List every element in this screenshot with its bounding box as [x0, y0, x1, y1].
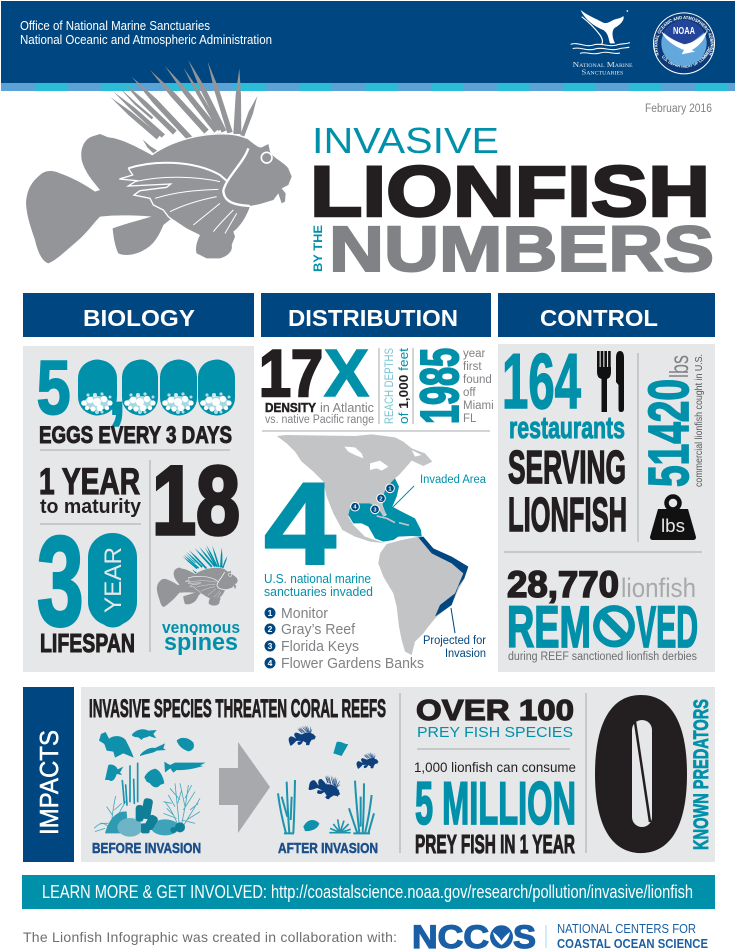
- heading: threat to reefs: INVASIVE SPECIES THREATEN CORAL REEFS: [89, 695, 386, 723]
- stat: 164 restaurants: LIONFISH: [508, 489, 627, 542]
- stat: 18 venomous spines: spines: [164, 629, 238, 656]
- logo: NOAA: NOAA: [673, 26, 695, 37]
- section headings: [23, 293, 715, 337]
- callout: projected for invasion: Projected for: [423, 635, 486, 647]
- header text: [20, 18, 272, 47]
- stat: 5 million prey fish: PREY FISH IN 1 YEAR: [415, 829, 575, 859]
- stat: 28,770 removed: [507, 564, 698, 663]
- legend: sanctuaries: 2: [268, 624, 273, 634]
- stat: 17X density: in Atlantic: [320, 401, 374, 415]
- caption: after: AFTER INVASION: [278, 841, 378, 857]
- legend: sanctuaries: Florida Keys: [281, 638, 359, 655]
- title: NUMBERS: [329, 213, 714, 285]
- stat: 51420 lbs: commercial lionfish cought in U.S.: [693, 354, 705, 487]
- stat: 1 year to maturity: [39, 461, 142, 518]
- stat: 30 year lifespan: LIFESPAN: [40, 628, 135, 658]
- title: BY THE: [313, 225, 325, 272]
- section headings: BIOLOGY: [83, 305, 195, 331]
- stat: 1985: year: [463, 348, 486, 360]
- stat: 164 restaurants: SERVING: [508, 441, 626, 493]
- callout: projected for invasion: [423, 608, 486, 660]
- map of the Americas: 3: [373, 507, 377, 513]
- stat: 5 million prey fish: 5 MILLION: [415, 770, 576, 837]
- stat: 50,000 eggs: 50,000: [37, 346, 234, 431]
- stat: 1985: first: [463, 361, 482, 373]
- stat: 18 venomous spines: venomous: [162, 618, 240, 637]
- stat: 1985: FL: [463, 413, 477, 425]
- logo: national marine sanctuaries: [571, 10, 633, 76]
- logo: national marine sanctuaries: Sanctuaries: [582, 68, 624, 76]
- arrow: [219, 742, 270, 833]
- legend: sanctuaries: 4: [268, 658, 273, 668]
- legend: sanctuaries: [264, 605, 424, 672]
- title: LIONFISH: [310, 153, 710, 232]
- icon: knife: [616, 351, 624, 412]
- stat: 28,770 removed: lionfish: [621, 573, 696, 603]
- impacts label: IMPACTS: [34, 730, 64, 835]
- stat: 50,000 eggs: EGGS EVERY 3 DAYS: [39, 422, 232, 449]
- stat: 1 year to maturity: to maturity: [40, 496, 142, 518]
- legend: sanctuaries: Monitor: [281, 605, 328, 622]
- banner: learn more: [22, 875, 715, 909]
- icon: weight: [650, 496, 696, 540]
- stat: 51420 lbs: 51420: [637, 379, 701, 487]
- lionfish illustration: [26, 60, 292, 263]
- stat: 30 year lifespan: YEAR: [100, 547, 127, 613]
- callout: invaded area: Invaded Area: [420, 474, 487, 486]
- header text: Office of National Marine Sanctuaries: [20, 18, 210, 33]
- stat: 30 year lifespan: 30: [37, 511, 136, 652]
- map of the Americas: 1: [388, 486, 392, 492]
- icon: fork: [597, 351, 611, 412]
- stat: prey species: PREY FISH SPECIES: [417, 725, 573, 741]
- stat: 1985: [410, 348, 494, 425]
- map of the Americas: 4: [353, 505, 357, 511]
- stat: 1985: Miami: [463, 400, 494, 412]
- stat: 18 venomous spines: [152, 446, 240, 656]
- stat: 17X density: 17: [259, 336, 323, 410]
- stat: 28,770 removed: REM: [507, 595, 591, 660]
- stat: prey species: [416, 695, 574, 741]
- stat: 4 sanctuaries: 4: [264, 458, 336, 589]
- stat: depth: [384, 347, 411, 424]
- logo: NOAA: [653, 12, 715, 74]
- stat: 164 restaurants: restaurants: [509, 410, 625, 445]
- stat: 5 million prey fish: [414, 759, 576, 859]
- stat: 4 sanctuaries: sanctuaries invaded: [264, 584, 373, 599]
- stat: 28,770 removed: 28,770: [507, 564, 619, 605]
- stat: 4 sanctuaries: U.S. national marine: [264, 571, 371, 586]
- logo: NOAA: NATIONAL OCEANIC AND ATMOSPHERIC ADMINISTRATION: [654, 16, 714, 56]
- map of the Americas: 2: [379, 496, 383, 502]
- stat: depth: of 1,000 feet: [397, 347, 411, 424]
- legend: sanctuaries: 1: [268, 608, 273, 618]
- icon: weight: lbs: [661, 516, 685, 536]
- logo: NCCOS: NATIONAL CENTERS FOR: [557, 922, 696, 936]
- stat: zero predators: 0: [597, 656, 685, 897]
- stat: 1985: 1985: [410, 348, 470, 424]
- stat: 1985: found: [463, 374, 492, 386]
- legend: sanctuaries: 3: [268, 641, 273, 651]
- legend: sanctuaries: Gray’s Reef: [281, 621, 356, 638]
- stat: 51420 lbs: [637, 354, 705, 540]
- stat: 1985: off: [463, 387, 476, 399]
- stat: 5 million prey fish: 1,000 lionfish can consume: [414, 759, 576, 775]
- date: February 2016: [645, 103, 712, 115]
- panel: control: [498, 337, 715, 672]
- stat: 1 year to maturity: 1 YEAR: [39, 461, 140, 502]
- section headings: CONTROL: [540, 305, 658, 331]
- title: [310, 120, 714, 285]
- scene: before invasion: [94, 729, 206, 837]
- logo: NOAA: U.S. DEPARTMENT OF COMMERCE: [662, 46, 712, 68]
- impacts label: [23, 687, 74, 862]
- stat: 17X density: DENSITY: [265, 400, 316, 415]
- panel: impacts: [23, 656, 715, 897]
- stat: 51420 lbs: lbs: [664, 355, 694, 378]
- stat: 164 restaurants: 164: [502, 337, 581, 425]
- icon: prohibition sign: [593, 605, 635, 647]
- logo: NCCOS: [412, 919, 708, 950]
- stat: 17X density: X: [324, 336, 369, 411]
- stat: zero predators: KNOWN PREDATORS: [690, 699, 713, 850]
- footer credit: The Lionfish Infographic was created in collaboration with:: [23, 929, 397, 945]
- stat: 28,770 removed: during REEF sanctioned lionfish derbies: [508, 651, 697, 663]
- icon: small lionfish: [157, 545, 238, 607]
- section headings: DISTRIBUTION: [288, 305, 458, 331]
- header text: National Oceanic and Atmospheric Administration: [20, 32, 272, 47]
- scene: after invasion: [278, 725, 378, 833]
- stat: 164 restaurants: [502, 337, 627, 542]
- callout: projected for invasion: Invasion: [445, 648, 486, 660]
- stat: 17X density: [259, 336, 374, 426]
- title: INVASIVE: [312, 120, 499, 161]
- stat: 18 venomous spines: 18: [152, 446, 240, 555]
- panel: biology: [23, 346, 254, 672]
- stat: 28,770 removed: O: [594, 595, 635, 660]
- header band: [1, 1, 735, 91]
- callout: invaded area: [393, 474, 487, 507]
- caption: before: BEFORE INVASION: [92, 841, 201, 857]
- stat: prey species: OVER 100: [416, 695, 574, 727]
- stat: 4 sanctuaries: [264, 458, 373, 599]
- stat: depth: REACH DEPTHS: [384, 348, 396, 424]
- stat: 17X density: vs. native Pacific range: [265, 414, 374, 426]
- logo: national marine sanctuaries: National Marine: [573, 60, 633, 69]
- panel: distribution: [259, 336, 494, 672]
- map of the Americas: [277, 434, 468, 655]
- legend: sanctuaries: Flower Gardens Banks: [281, 655, 424, 672]
